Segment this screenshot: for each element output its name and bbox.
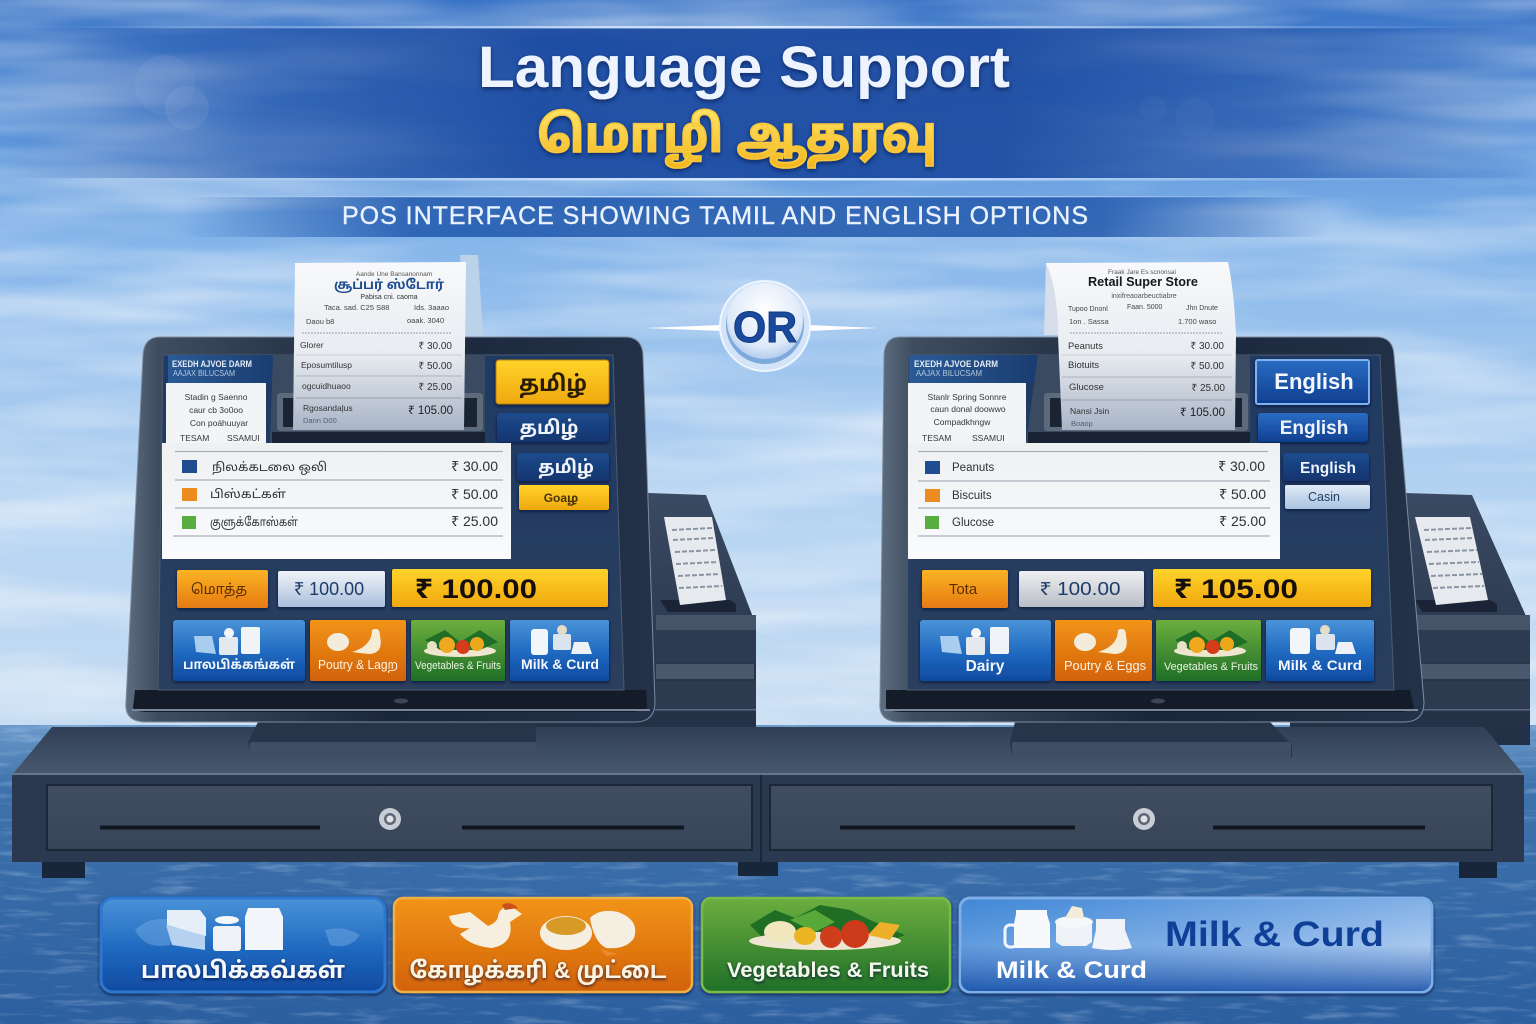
receipt: Retail Super Store bbox=[1088, 275, 1198, 289]
small receipt bbox=[664, 517, 726, 605]
receipt: Biotuits bbox=[1068, 360, 1099, 371]
grand total bbox=[1153, 569, 1371, 607]
total label bbox=[177, 570, 268, 608]
category: vegetables: Vegetables & Fruits bbox=[415, 660, 501, 672]
title: Tamil: மொழி ஆதரவு bbox=[537, 107, 937, 169]
items panel: பிஸ்கட்கள் bbox=[210, 487, 286, 501]
screen bbox=[907, 355, 1394, 690]
receipt: Faan. 5000 bbox=[1127, 304, 1163, 311]
language button 3: English bbox=[1300, 460, 1356, 477]
back printer: left bbox=[530, 493, 756, 745]
receipt: ₹ 50.00 bbox=[418, 361, 452, 372]
store info panel: TESAM bbox=[922, 433, 951, 443]
store info panel: Stanlr Spring Sonnre bbox=[928, 392, 1007, 402]
category: vegetables bbox=[411, 620, 505, 681]
grand total: ₹ 105.00 bbox=[1174, 574, 1298, 604]
receipt: Ids. 3aaao bbox=[414, 303, 449, 312]
language button 3 bbox=[1283, 453, 1369, 481]
receipt: Aande Une Bansanonnam bbox=[356, 271, 432, 278]
total label: மொத்த bbox=[191, 581, 247, 599]
category: poultry bbox=[1055, 620, 1152, 681]
label: large: Milk & Curd bbox=[1165, 915, 1384, 954]
store info panel bbox=[166, 383, 266, 445]
category: milk: Milk & Curd bbox=[521, 657, 599, 672]
store info panel: Stadin g Saenno bbox=[185, 392, 248, 402]
label: small: Milk & Curd bbox=[996, 957, 1147, 984]
bezel bbox=[880, 337, 1424, 722]
bezel bbox=[126, 337, 655, 722]
bottom button: poultry Tamil: கோழக்கரி & முட்டை bbox=[410, 957, 666, 986]
items panel bbox=[162, 443, 511, 559]
icon: dairy packs bbox=[166, 908, 283, 951]
receipt: Tupoo Dnonl bbox=[1068, 306, 1108, 313]
screen header: EXEDH AJVOE DARM bbox=[914, 359, 998, 369]
category: poultry: Poutry & Eggs bbox=[1064, 659, 1146, 673]
items panel: Biscuits bbox=[952, 490, 992, 502]
store info panel bbox=[908, 383, 1026, 445]
subtotal bbox=[278, 571, 385, 607]
screen header bbox=[909, 355, 1038, 383]
receipt: ₹ 105.00 bbox=[1180, 407, 1225, 419]
POS terminal: English bbox=[880, 262, 1424, 722]
printer slot bbox=[1026, 355, 1250, 444]
subtotal: ₹ 100.00 bbox=[294, 579, 364, 599]
screen header: AAJAX BILUCSAM bbox=[916, 369, 982, 378]
receipt: Daou b8 bbox=[306, 317, 334, 326]
items panel: ₹ 25.00 bbox=[451, 513, 498, 529]
receipt: ₹ 25.00 bbox=[418, 382, 452, 393]
store info panel: caun donal doowwo bbox=[930, 404, 1006, 414]
receipt: Peanuts bbox=[1068, 341, 1103, 352]
store info panel: caur cb 3o0oo bbox=[189, 405, 243, 415]
receipt: Eposumtilusp bbox=[301, 360, 352, 370]
grand total: ₹ 100.00 bbox=[415, 574, 537, 604]
subtotal: ₹ 100.00 bbox=[1040, 579, 1120, 599]
icon: milk jug and curd bbox=[1005, 906, 1132, 950]
receipt: Taca. sad. C25 S88 bbox=[324, 303, 389, 312]
POS terminal: Tamil bbox=[126, 255, 655, 722]
receipt: Fraak Jare Es scnonsai bbox=[1108, 269, 1176, 276]
title banner bbox=[0, 26, 1536, 180]
bottom button: poultry Tamil bbox=[394, 898, 692, 992]
store info panel: SSAMUI bbox=[227, 433, 260, 443]
items panel: நிலக்கடலை ஒலி bbox=[212, 460, 327, 475]
icon: hen and eggs bbox=[449, 903, 635, 956]
screen header bbox=[168, 355, 273, 383]
bottom button: dairy Tamil: பாலபிக்கவ்கள் bbox=[141, 957, 345, 983]
category: dairy bbox=[173, 620, 305, 681]
receipt: ₹ 30.00 bbox=[418, 341, 452, 352]
subtitle band: POS INTERFACE SHOWING TAMIL AND ENGLISH OPTIONS bbox=[342, 202, 1088, 230]
receipt: ogcuidhuaoo bbox=[302, 381, 351, 391]
items panel: ₹ 30.00 bbox=[451, 458, 498, 474]
cash drawer: left bbox=[12, 727, 778, 878]
language button 4: Goaழ bbox=[544, 491, 578, 507]
receipt: Glucose bbox=[1069, 382, 1104, 393]
bottom button: milk and curd bbox=[960, 898, 1432, 992]
store info panel: TESAM bbox=[180, 433, 209, 443]
bottom button: dairy Tamil bbox=[101, 898, 385, 992]
category: dairy: பாலபிக்கங்கள் bbox=[183, 657, 296, 672]
receipt: Pabisa cni. caoma bbox=[360, 294, 418, 301]
OR badge: OR bbox=[733, 303, 797, 352]
category: dairy bbox=[920, 620, 1051, 681]
language buttons: தமிழ் bbox=[519, 371, 587, 398]
language buttons bbox=[496, 360, 609, 404]
receipt fold bbox=[460, 255, 483, 335]
receipt: 1.700 waso bbox=[1178, 317, 1216, 326]
receipt: ₹ 105.00 bbox=[408, 405, 453, 417]
items panel: Peanuts bbox=[952, 462, 994, 474]
receipt: Glorer bbox=[300, 340, 324, 350]
category: vegetables: Vegetables & Fruits bbox=[1164, 661, 1258, 673]
cash button: Casin bbox=[1308, 490, 1340, 504]
category: milk bbox=[1266, 620, 1374, 681]
subtotal bbox=[1019, 571, 1144, 607]
category: poultry bbox=[310, 620, 406, 681]
title: English: Language Support bbox=[478, 35, 1010, 100]
receipt: ₹ 25.00 bbox=[1191, 383, 1225, 394]
store info panel: SSAMUI bbox=[972, 433, 1005, 443]
receipt: ₹ 30.00 bbox=[1190, 341, 1224, 352]
monitor stand: left bbox=[248, 722, 536, 757]
OR badge bbox=[645, 281, 878, 371]
items panel: ₹ 50.00 bbox=[451, 486, 498, 502]
screen bbox=[158, 355, 624, 690]
language button 3: தமிழ் bbox=[538, 457, 594, 479]
receipt: சூப்பர் ஸ்டோர் bbox=[334, 277, 444, 294]
receipt: Jhn Dnute bbox=[1186, 305, 1218, 312]
category: milk: Milk & Curd bbox=[1278, 657, 1362, 673]
receipt: Nansi Jsin bbox=[1070, 406, 1109, 416]
total label: Tota bbox=[949, 581, 978, 598]
total label bbox=[922, 570, 1008, 608]
small receipt bbox=[1415, 517, 1488, 605]
subtitle band bbox=[180, 196, 1330, 237]
category: poultry: Poutry & Lagற bbox=[318, 658, 398, 673]
receipt: 1on . Sassa bbox=[1069, 317, 1109, 326]
language button 2 bbox=[497, 413, 609, 442]
language buttons bbox=[1256, 360, 1369, 404]
language button 2: English bbox=[1280, 418, 1348, 439]
grand total bbox=[392, 569, 608, 607]
receipt bbox=[1046, 262, 1236, 430]
items panel: குளுக்கோஸ்கள் bbox=[210, 515, 298, 530]
receipt: ₹ 50.00 bbox=[1190, 361, 1224, 372]
category: dairy: Dairy bbox=[966, 658, 1005, 675]
screen header: EXEDH AJVOE DARM bbox=[172, 359, 252, 369]
cash drawer: right bbox=[760, 727, 1524, 878]
receipt: inxifreaoarbeuctiabre bbox=[1111, 293, 1177, 300]
lock bbox=[379, 808, 401, 830]
receipt: Rgosandaļus bbox=[303, 403, 353, 413]
language button 3 bbox=[517, 453, 609, 481]
language button 2: தமிழ் bbox=[520, 418, 578, 440]
items panel: ₹ 50.00 bbox=[1219, 486, 1266, 502]
icon: plate of vegetables bbox=[749, 905, 905, 950]
items panel: ₹ 25.00 bbox=[1219, 513, 1266, 529]
items panel bbox=[908, 443, 1280, 559]
back printer: right bbox=[1290, 493, 1530, 745]
bottom button: vegetables: Vegetables & Fruits bbox=[727, 959, 929, 982]
receipt: Boaop bbox=[1071, 419, 1093, 428]
store info panel: Con poáhuuyar bbox=[190, 418, 248, 428]
monitor stand: right bbox=[1010, 722, 1292, 757]
cash button bbox=[1285, 485, 1370, 509]
lock bbox=[1133, 808, 1155, 830]
language button 2 bbox=[1258, 413, 1368, 442]
receipt fold bbox=[1044, 263, 1060, 335]
items panel: ₹ 30.00 bbox=[1218, 458, 1265, 474]
items panel: Glucose bbox=[952, 517, 994, 529]
receipt: oaak. 3040 bbox=[407, 316, 444, 325]
language buttons: English bbox=[1274, 369, 1354, 394]
screen header: AAJAX BILUCSAM bbox=[173, 369, 235, 378]
store info panel: Compadkhngw bbox=[934, 417, 991, 427]
bottom button: vegetables bbox=[702, 898, 950, 992]
language button 4 bbox=[519, 485, 609, 510]
printer slot bbox=[270, 355, 485, 444]
receipt bbox=[293, 262, 466, 430]
category: vegetables bbox=[1156, 620, 1261, 681]
category: milk bbox=[510, 620, 609, 681]
receipt: Dann D00 bbox=[303, 416, 337, 425]
